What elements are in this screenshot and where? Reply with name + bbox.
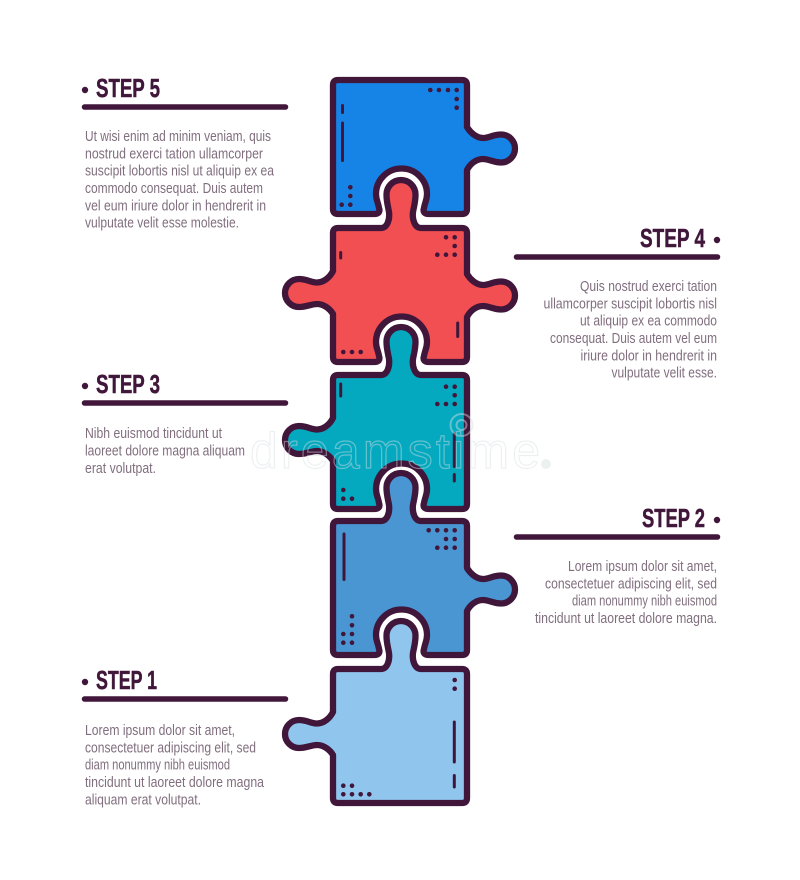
text block: step 4: ullamcorper suscipit lobortis nisl: [544, 296, 717, 312]
text block: step 4: consequat. Duis autem vel eum: [550, 331, 717, 347]
details: step 5 piece: [339, 88, 459, 207]
text block: step 2: [535, 559, 717, 627]
text block: step 3: [85, 426, 245, 477]
heading: step 4: STEP 4: [640, 223, 705, 253]
text block: step 3: laoreet dolore magna aliquam: [85, 444, 245, 460]
text block: step 5: suscipit lobortis nisl ut aliquip ex ea: [85, 164, 275, 180]
heading: step 2: STEP 2: [642, 503, 705, 533]
heading: step 3: STEP 3: [96, 369, 160, 399]
text block: step 4: iriure dolor in hendrerit in: [580, 348, 717, 364]
text block: step 2: tincidunt ut laoreet dolore magna.: [535, 611, 717, 627]
text block: step 5: nostrud exerci tation ullamcorper: [85, 146, 263, 162]
watermark: dreamstime: [250, 423, 540, 479]
details: step 3 piece: [341, 384, 457, 501]
text block: step 4: Quis nostrud exerci tation: [580, 279, 717, 295]
details: step 2 piece: [341, 528, 457, 645]
step 5 label: [82, 73, 286, 232]
text block: step 5: commodo consequat. Duis autem: [85, 181, 263, 197]
step 2 label: [516, 503, 720, 627]
step 1 label: [82, 665, 286, 808]
step 3 label: [82, 369, 286, 477]
puzzle piece: step 4: [285, 180, 515, 362]
text block: step 5: vel eum iriure dolor in hendrerit in: [85, 198, 266, 214]
puzzle piece: step 5: [333, 80, 515, 214]
puzzle piece: step 1: [285, 621, 467, 803]
text block: step 1: diam nonummy nibh euismod: [85, 758, 230, 774]
text block: step 2: Lorem ipsum dolor sit amet,: [568, 559, 717, 575]
puzzle piece: step 2: [333, 473, 515, 655]
text block: step 2: diam nonummy nibh euismod: [572, 594, 717, 610]
heading: step 5: STEP 5: [96, 73, 160, 103]
text block: step 5: vulputate velit esse molestie.: [85, 216, 239, 232]
text block: step 3: erat volutpat.: [85, 461, 156, 477]
text block: step 1: Lorem ipsum dolor sit amet,: [85, 723, 235, 739]
text block: step 1: consectetuer adipiscing elit, sed: [85, 740, 256, 756]
text block: step 3: Nibh euismod tincidunt ut: [85, 426, 222, 442]
step 4 label: [516, 223, 720, 382]
text block: step 4: [544, 279, 717, 382]
details: step 4 piece: [341, 235, 458, 354]
text block: step 4: vulputate velit esse.: [612, 366, 717, 382]
text block: step 5: [85, 129, 275, 232]
details: step 1 piece: [341, 678, 457, 797]
heading: step 1: STEP 1: [96, 665, 157, 695]
text block: step 4: ut aliquip ex ea commodo: [580, 314, 717, 330]
text block: step 1: aliquam erat volutpat.: [85, 792, 201, 808]
puzzle piece: step 3: [285, 327, 467, 509]
text block: step 1: [85, 723, 265, 808]
text block: step 1: tincidunt ut laoreet dolore magna: [85, 775, 265, 791]
text block: step 2: consectetuer adipiscing elit, sed: [545, 576, 717, 592]
text block: step 5: Ut wisi enim ad minim veniam, quis: [85, 129, 271, 145]
